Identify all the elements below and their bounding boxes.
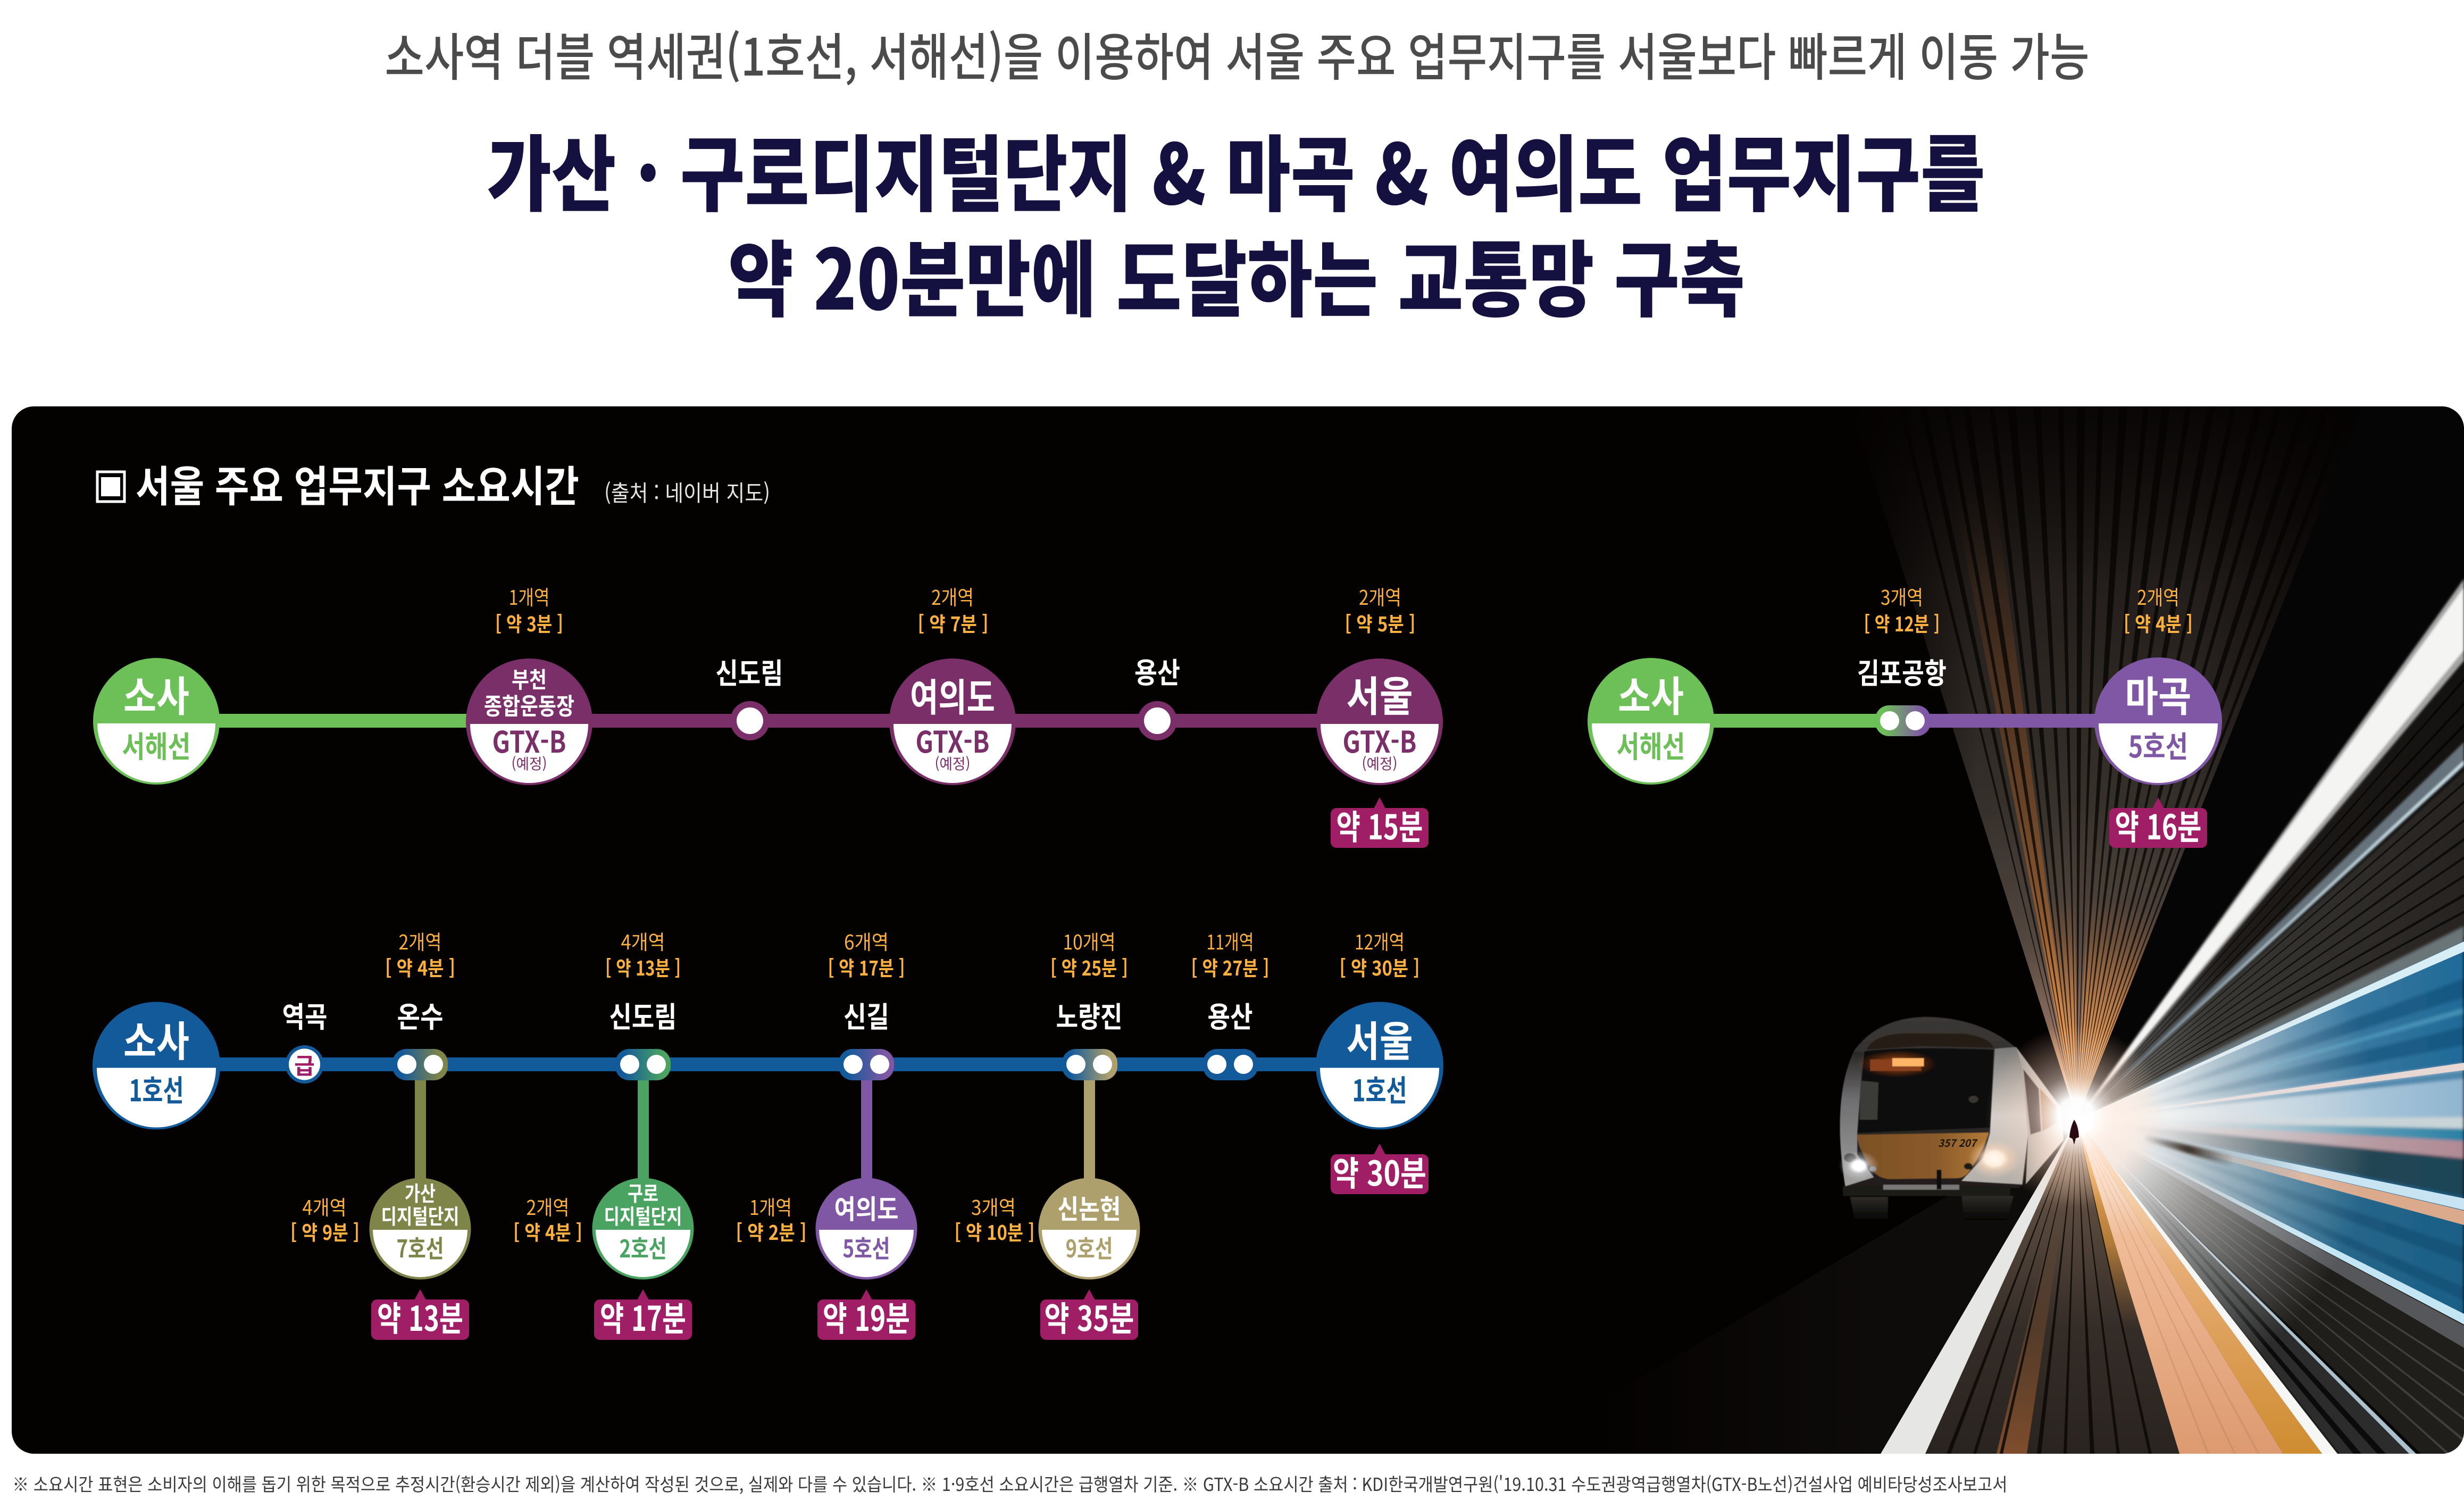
station: 노량진 transfer: 노량진 [1056, 994, 1122, 1036]
travel labels: upper row: [ 약 27분 ] [1191, 952, 1269, 981]
station: 서울 1호선: 1호선 [1352, 1067, 1407, 1111]
travel labels: upper row: 4개역 [621, 926, 665, 955]
travel labels: branch lines: 1개역 [749, 1191, 792, 1221]
travel labels: top row: 1개역 [508, 581, 550, 611]
station: 소사 1호선 [93, 1002, 220, 1130]
station: 신도림 transfer [609, 994, 676, 1080]
badge: 약 19분: 약 19분 [823, 1292, 910, 1341]
station: 용산 node: 용산 [1134, 649, 1180, 691]
travel labels: upper row: [ 약 30분 ] [1339, 952, 1420, 981]
station: 여의도 GTX-B: 여의도 [910, 666, 995, 722]
station: 가산디지털단지 7호선: 디지털단지 [381, 1201, 460, 1230]
station: 소사 서해선: 서해선 [1617, 723, 1685, 766]
station: 신도림 node [716, 650, 783, 740]
station: 구로디지털단지 2호선: 디지털단지 [604, 1201, 682, 1230]
station: 신논현 9호선: 9호선 [1066, 1230, 1113, 1265]
station: 역곡 express stop: 역곡 [282, 994, 328, 1036]
panel heading: 서울 주요 업무지구 소요시간 [136, 453, 579, 514]
travel labels: upper row [385, 926, 1420, 981]
travel labels: upper row: 6개역 [844, 926, 889, 955]
illustration: tunnel light streaks [1596, 406, 2464, 1454]
station: 가산디지털단지 7호선 [369, 1178, 471, 1280]
station: 신길 transfer [839, 994, 894, 1080]
title: 약 20분만에 도달하는 교통망 구축 [728, 213, 1745, 334]
station: 용산 transfer: 용산 [1207, 994, 1253, 1036]
illustration: train [1839, 1017, 2064, 1220]
travel labels: 김포공항, 마곡 [1864, 581, 2193, 637]
travel labels: branch lines: [ 약 9분 ] [290, 1216, 360, 1246]
badge: 약 17분: 약 17분 [600, 1292, 686, 1341]
panel: dark background with subway photo [12, 406, 2464, 1454]
travel labels: branch lines: 4개역 [302, 1191, 347, 1221]
station: 신논현 9호선 [1038, 1178, 1140, 1280]
station: 부천종합운동장: 부천 [512, 662, 547, 695]
route: 1호선 소사 to 서울 with branches [93, 926, 1443, 1341]
station: 서울 GTX-B: GTX-B [1342, 719, 1417, 762]
station: 노량진 transfer [1056, 994, 1122, 1080]
station: 마곡 5호선: 5호선 [2128, 723, 2188, 766]
travel labels: top row: [ 약 3분 ] [495, 608, 563, 637]
subtitle: 소사역 더블 역세권(1호선, 서해선)을 이용하여 서울 주요 업무지구를 서울보다 빠르게 이동 가능 [385, 16, 2089, 90]
footnote: ※ 소요시간 표현은 소비자의 이해를 돕기 위한 목적으로 추정시간(환승시간 제외)을 계산하여 작성된 것으로, 실제와 다를 수 있습니다. ※ 1·9호선 소요시간은 급행열차 기준. ※ GTX-B 소요시간 출처 : KDI한국개발연구원('19.10.31 수도권광역급행열차(GTX-B노선)건설사업 예비타당성조사보고서 [13, 1470, 2007, 1496]
station: 가산디지털단지 7호선: 7호선 [397, 1230, 444, 1265]
route: 소사 to 마곡 via 김포공항 [1588, 581, 2222, 849]
station: 소사 1호선: 소사 [123, 1009, 189, 1068]
station: 김포공항 transfer: 김포공항 [1857, 650, 1947, 692]
station: 부천종합운동장 [466, 659, 592, 785]
train number: 357 207 [1938, 1136, 1978, 1150]
travel labels: upper row: 11개역 [1206, 926, 1254, 955]
station: 신도림 transfer: 신도림 [609, 994, 676, 1036]
station: 서울 GTX-B: (예정) [1362, 753, 1398, 774]
travel labels: branch lines: 2개역 [527, 1191, 569, 1221]
station: 역곡 express stop [282, 994, 328, 1084]
station: 서울 GTX-B: 서울 [1347, 664, 1413, 723]
route: 소사 to 서울 via GTX-B [93, 581, 1443, 849]
station: 온수 transfer: 온수 [397, 994, 444, 1036]
station: 역곡 express stop: 급 [294, 1048, 315, 1081]
station: 온수 transfer [392, 994, 448, 1080]
badge: 약 16분: 약 16분 [2115, 801, 2202, 849]
travel labels: 김포공항, 마곡: 3개역 [1881, 581, 1923, 611]
station: 구로디지털단지 2호선: 2호선 [619, 1230, 667, 1265]
station: 김포공항 transfer [1857, 650, 1947, 736]
badge: 약 30분: 약 30분 [1333, 1147, 1426, 1196]
travel labels: upper row: [ 약 4분 ] [385, 952, 455, 981]
station: 구로디지털단지 2호선 [592, 1178, 694, 1280]
travel labels: top row [495, 581, 1416, 637]
station: 여의도 5호선: 5호선 [842, 1230, 890, 1265]
station: 부천종합운동장: 종합운동장 [484, 687, 574, 721]
travel labels: branch lines: [ 약 4분 ] [513, 1216, 582, 1246]
station: 소사 1호선: 1호선 [129, 1067, 184, 1111]
travel labels: branch lines: 3개역 [971, 1191, 1016, 1221]
station: 서울 1호선: 서울 [1347, 1009, 1413, 1068]
badge: 약 13분: 약 13분 [377, 1292, 463, 1341]
station: 가산디지털단지 7호선: 가산 [405, 1178, 436, 1207]
title: 가산 · 구로디지털단지 & 마곡 & 여의도 업무지구를 [487, 108, 1985, 228]
station: 서울 1호선 [1316, 1002, 1443, 1130]
travel labels: top row: 2개역 [931, 581, 974, 611]
badge: 약 35분: 약 35분 [1045, 1292, 1134, 1341]
title [487, 108, 1985, 334]
travel labels: 김포공항, 마곡: 2개역 [2137, 581, 2179, 611]
travel labels: branch lines: [ 약 2분 ] [736, 1216, 806, 1246]
badge: 약 15분: 약 15분 [1336, 801, 1423, 849]
travel labels: 김포공항, 마곡: [ 약 12분 ] [1864, 608, 1940, 637]
branch lines [415, 1077, 1095, 1181]
station: 용산 transfer [1203, 994, 1258, 1080]
station: 여의도 GTX-B [889, 659, 1016, 785]
travel labels: top row: 2개역 [1359, 581, 1401, 611]
station: 여의도 GTX-B: GTX-B [916, 719, 989, 762]
travel labels: upper row: 2개역 [399, 926, 441, 955]
travel labels: upper row: [ 약 13분 ] [605, 952, 681, 981]
station: 마곡 5호선: 마곡 [2125, 664, 2191, 723]
travel labels: branch lines [290, 1191, 1035, 1246]
travel labels: upper row: 12개역 [1355, 926, 1405, 955]
station: 마곡 5호선 [2094, 657, 2222, 785]
station: 소사 서해선: 소사 [123, 664, 189, 723]
travel labels: upper row: [ 약 17분 ] [828, 952, 905, 981]
station: 여의도 5호선 [816, 1178, 917, 1280]
station: 여의도 GTX-B: (예정) [935, 753, 970, 774]
light glow at tunnel end [1989, 1030, 2155, 1203]
travel labels: upper row: [ 약 25분 ] [1050, 952, 1128, 981]
station: 신길 transfer: 신길 [843, 994, 889, 1036]
station: 소사 서해선 [93, 658, 220, 785]
travel labels: upper row: 10개역 [1063, 926, 1116, 955]
travel labels: 김포공항, 마곡: [ 약 4분 ] [2124, 608, 2193, 637]
travel labels: branch lines: [ 약 10분 ] [954, 1216, 1035, 1246]
station: 소사 서해선: 소사 [1618, 664, 1684, 723]
station: 신논현 9호선: 신논현 [1057, 1188, 1121, 1227]
station: 용산 node [1134, 649, 1180, 740]
icon: walking figure silhouette [2069, 1120, 2079, 1145]
travel labels: top row: [ 약 7분 ] [918, 608, 988, 637]
station: 구로디지털단지 2호선: 구로 [628, 1178, 658, 1207]
panel heading: (출처 : 네이버 지도) [604, 476, 770, 508]
travel labels: top row: [ 약 5분 ] [1344, 608, 1416, 637]
station: 여의도 5호선: 여의도 [834, 1188, 899, 1227]
station: 신도림 node: 신도림 [716, 650, 783, 692]
station: 소사 서해선: 서해선 [122, 723, 190, 766]
station: 서울 GTX-B [1316, 659, 1443, 785]
station: 소사 서해선 [1588, 658, 1714, 785]
station: 부천종합운동장: GTX-B [492, 719, 566, 762]
station: 부천종합운동장: (예정) [512, 753, 547, 774]
